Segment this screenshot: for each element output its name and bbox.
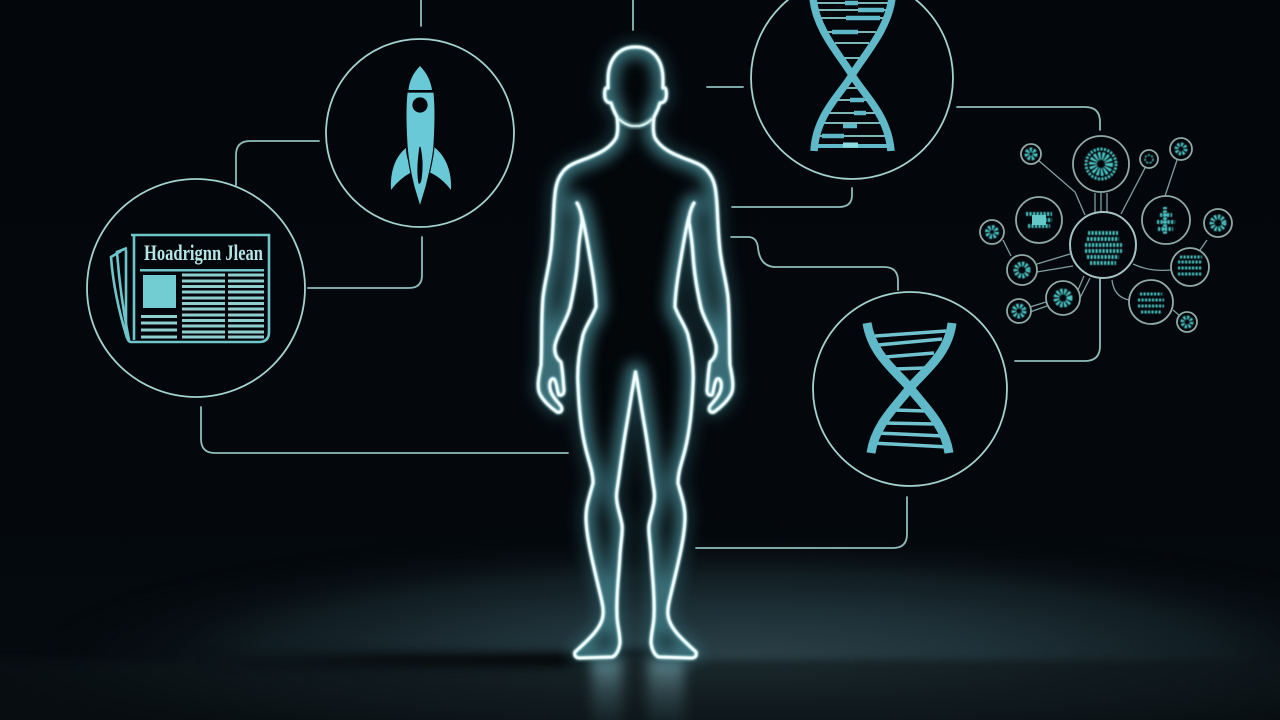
newspaper masthead: Hoadrignn Jlean xyxy=(144,240,263,265)
icon: newspaper xyxy=(111,235,269,342)
human body figure xyxy=(530,40,740,670)
icon: rocket xyxy=(391,66,451,207)
network icon cluster xyxy=(980,136,1232,332)
DNA circle panel top xyxy=(751,0,953,179)
rocket circle panel xyxy=(326,39,514,227)
bright outline xyxy=(538,47,733,658)
network node top xyxy=(1073,136,1129,192)
icon: DNA helix bottom xyxy=(867,323,952,453)
inner body shading xyxy=(540,48,732,657)
floor reflection of right leg xyxy=(648,660,684,720)
network hub node xyxy=(1070,212,1136,278)
newspaper text columns xyxy=(141,275,264,337)
icon: DNA helix top xyxy=(813,0,892,151)
network node glyphs xyxy=(988,144,1224,326)
newspaper photo block xyxy=(143,275,176,308)
outer glow xyxy=(538,47,733,658)
wall and floor glow xyxy=(0,520,1280,720)
network links xyxy=(1003,160,1207,316)
DNA circle panel bottom xyxy=(813,292,1007,486)
floor shadow left of feet xyxy=(200,653,590,666)
soft outline xyxy=(538,47,733,658)
floor shadow between feet xyxy=(612,651,658,657)
newspaper circle panel xyxy=(87,179,305,397)
connector lines xyxy=(201,0,1100,548)
floor reflection of left leg xyxy=(592,660,622,720)
